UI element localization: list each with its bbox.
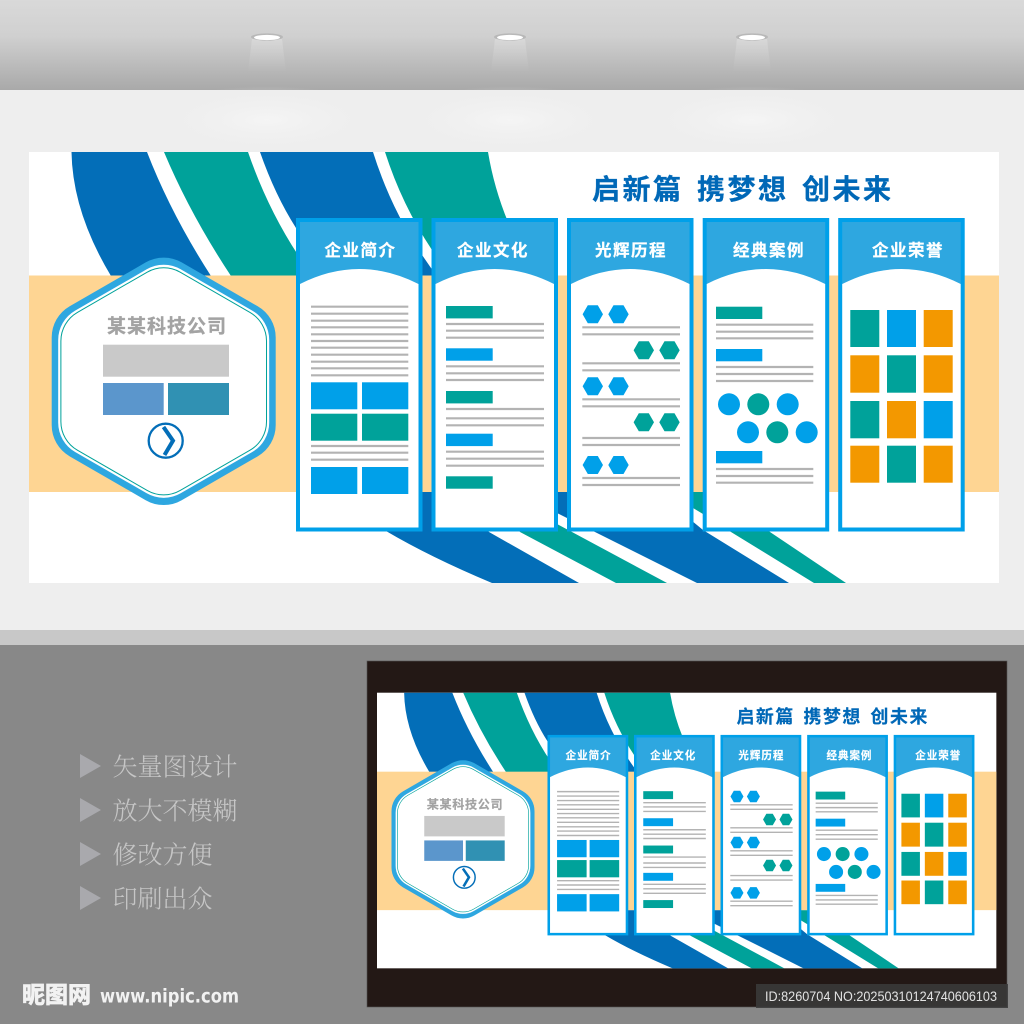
watermark logo: 昵图网 (22, 982, 91, 1008)
grey image block (103, 345, 229, 377)
preview panel: company profile (547, 735, 628, 935)
preview heading bars (816, 792, 845, 892)
wall glow (152, 86, 867, 154)
blue image block (103, 383, 164, 415)
panel heading: 企业简介 (324, 240, 396, 260)
preview title: 创未来 (871, 707, 929, 727)
preview hexagon frame (391, 760, 535, 918)
panel: classic cases (703, 218, 829, 532)
preview timeline hexagons (730, 791, 792, 899)
preview company name: 某某科技公司 (427, 796, 503, 811)
preview panel heading: 光辉历程 (738, 749, 784, 762)
feature text (112, 748, 238, 916)
icon: triangle bullets (80, 754, 101, 910)
hexagon company badge (52, 258, 276, 505)
dark framed preview (367, 661, 1007, 1007)
preview grey block (424, 816, 505, 836)
preview title: 启新篇 (736, 706, 795, 727)
icon: preview chevron circle (453, 866, 475, 888)
text lines (446, 324, 544, 466)
preview panel heading: 经典案例 (827, 749, 872, 762)
text lines (716, 325, 813, 483)
preview panel: corporate culture (634, 735, 715, 935)
gallery wall (0, 90, 1024, 630)
preview of wall design (377, 693, 996, 968)
title: 创未来 (802, 174, 894, 205)
preview orange band (377, 772, 996, 910)
decorative curved stripes top (72, 152, 520, 280)
panel heading: 企业文化 (457, 240, 529, 260)
preview case circles (817, 847, 881, 879)
icon: ceiling spotlights (248, 33, 771, 72)
preview text lines (816, 803, 878, 904)
preview text lines (643, 803, 706, 893)
preview panel: glorious history (721, 735, 801, 935)
preview background (377, 693, 996, 968)
text lines (582, 327, 680, 485)
panel heading: 经典案例 (733, 240, 805, 260)
preview panel heading: 企业简介 (566, 749, 612, 762)
heading bars (716, 307, 762, 463)
decorative stripes bottom (386, 492, 846, 583)
panel heading: 企业荣誉 (872, 240, 944, 260)
feature list (80, 748, 238, 916)
panel: company profile (296, 218, 422, 532)
timeline hexagons (583, 305, 680, 474)
main culture wall design (29, 152, 999, 583)
feature text: 放大不模糊 (112, 792, 238, 828)
preview image blocks (557, 840, 619, 911)
preview stripes bottom (605, 910, 899, 968)
preview heading bars (643, 791, 673, 908)
preview certificates grid (901, 794, 967, 904)
case circles (718, 393, 818, 443)
preview title: 携梦想 (804, 706, 862, 727)
preview blue block (424, 840, 463, 861)
preview teal block (466, 840, 505, 861)
feature text: 矢量图设计 (112, 748, 238, 784)
watermark logo (22, 982, 239, 1008)
wall background (29, 152, 999, 583)
image ID tag (756, 984, 1008, 1008)
lower grey panel (0, 645, 1024, 1024)
text lines (311, 307, 408, 460)
preview stripes top (404, 693, 691, 775)
honor certificates grid (850, 310, 953, 483)
heading bars (446, 306, 493, 489)
icon: chevron circle (149, 424, 183, 458)
company name: 某某科技公司 (107, 316, 227, 338)
panel heading: 光辉历程 (595, 241, 667, 260)
preview panel heading: 企业文化 (650, 749, 696, 762)
preview text lines (557, 792, 619, 889)
watermark logo: www.nipic.com (100, 986, 239, 1008)
panel: glorious history (567, 218, 694, 532)
feature text: 印刷出众 (112, 880, 213, 916)
ceiling wall (0, 0, 1024, 90)
teal image block (168, 383, 229, 415)
image ID tag: ID:8260704 NO:20250310124740606103 (765, 988, 997, 1004)
orange band (29, 276, 999, 492)
hexagon frame (52, 258, 276, 505)
preview panel: corporate honors (894, 735, 974, 935)
floor strip (0, 630, 1024, 645)
preview panel: classic cases (807, 735, 888, 935)
feature text: 修改方便 (112, 836, 213, 872)
preview panel heading: 企业荣誉 (915, 749, 961, 762)
title: 携梦想 (697, 174, 789, 205)
preview text lines (730, 805, 793, 906)
panel: corporate honors (838, 218, 965, 532)
panel: corporate culture (432, 218, 558, 532)
title: 启新篇 (592, 174, 684, 205)
image blocks (311, 382, 408, 494)
preview hexagon badge (391, 760, 535, 918)
